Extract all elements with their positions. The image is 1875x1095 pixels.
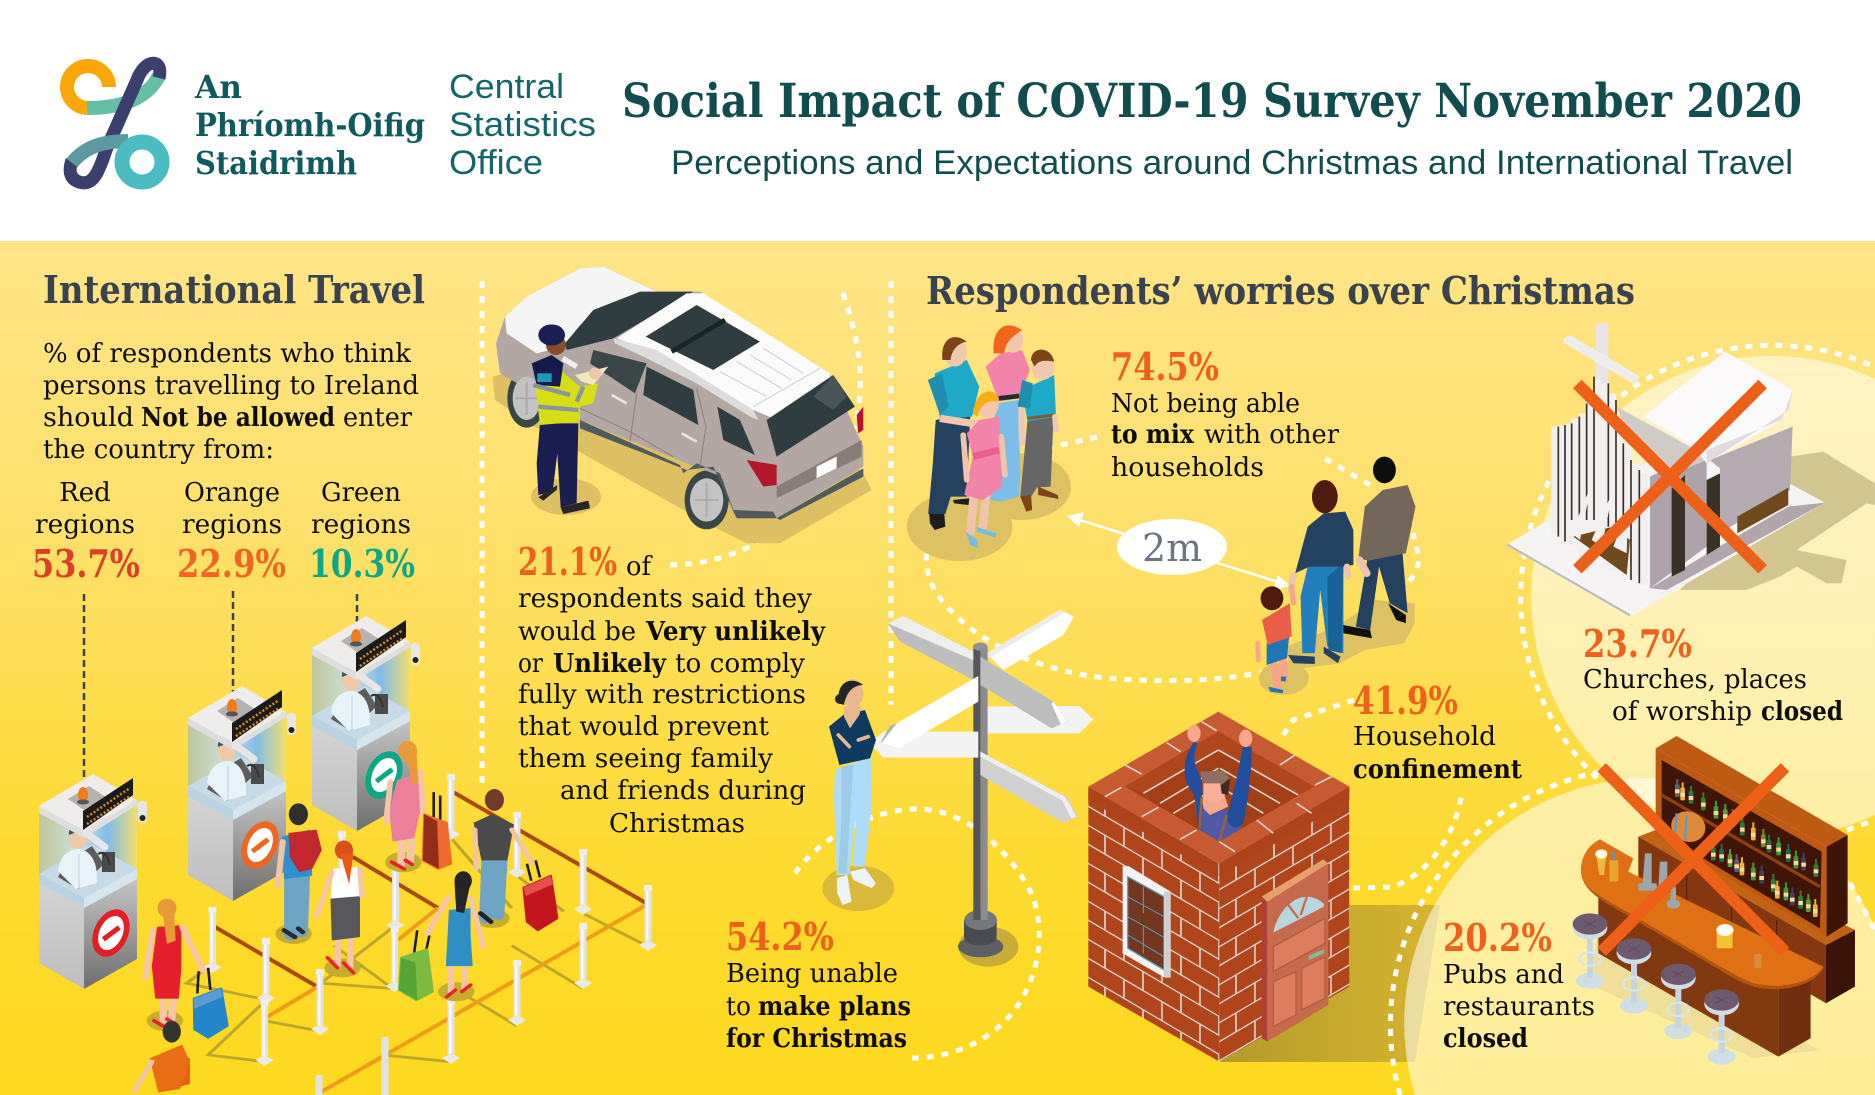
arrow: 2m distance: 2m xyxy=(1142,526,1202,570)
suitcase: green xyxy=(399,930,433,1000)
logo text: Irish name xyxy=(194,68,425,182)
text: 20.2% stat: closed xyxy=(1443,1024,1528,1054)
pale circle: churches xyxy=(1531,356,1875,838)
logo text: English name: Statistics xyxy=(449,106,596,144)
text: 74.5% stat: with other xyxy=(1204,420,1340,450)
text: 21.1% stat: of xyxy=(626,552,653,582)
text: 41.9% stat: Household xyxy=(1353,722,1496,752)
lower cabinet xyxy=(1638,830,1855,1003)
logo text: English name: Central xyxy=(449,68,564,106)
text: survey question: Not be allowed xyxy=(141,403,335,433)
region labels: Red xyxy=(59,478,111,508)
barrier ropes xyxy=(215,792,646,1092)
church fins xyxy=(1555,377,1643,585)
text: 23.7% stat: of worship xyxy=(1612,697,1752,727)
traveller: man with backpack xyxy=(275,803,322,944)
car windscreen xyxy=(565,292,693,350)
window xyxy=(1123,866,1171,978)
logo xyxy=(67,63,162,183)
bar counter top xyxy=(1581,839,1823,986)
church roof and walls xyxy=(1650,450,1707,588)
stat: orange regions: 22.9% xyxy=(177,541,286,586)
car wheels xyxy=(507,369,546,428)
beer taps xyxy=(1638,853,1680,909)
text: 54.2% stat: make plans xyxy=(758,992,911,1022)
text: survey question: the country from: xyxy=(43,435,274,465)
glasses and bottle xyxy=(1595,849,1762,968)
text: 23.7% stat: closed xyxy=(1761,697,1843,727)
text: 21.1% stat: to comply xyxy=(675,649,805,679)
traveller: man in orange shirt xyxy=(134,1021,190,1092)
woman in blue jeans xyxy=(1288,480,1353,664)
car bonnet xyxy=(505,267,657,353)
text: 54.2% stat: 54.2% xyxy=(726,914,834,959)
suitcase: blue xyxy=(194,968,228,1038)
region labels: Orange xyxy=(184,478,280,508)
text: 74.5% stat: 74.5% xyxy=(1111,344,1219,389)
illustration: second household xyxy=(1258,457,1416,695)
text: 21.1% stat: Unlikely xyxy=(553,649,667,679)
logo text: English name: Office xyxy=(449,144,543,182)
illustration: pub bar crossed out xyxy=(1573,736,1855,1065)
house left wall xyxy=(1088,787,1219,1062)
cross-out xyxy=(1577,384,1763,569)
text: survey question: enter xyxy=(343,403,413,433)
text: 21.1% stat: 21.1% xyxy=(518,539,617,584)
daughter xyxy=(963,391,1005,548)
car sunroof xyxy=(646,305,760,370)
car lights and plate xyxy=(747,460,777,487)
text: 54.2% stat: for Christmas xyxy=(726,1024,907,1054)
text: survey question: persons travelling to Ireland xyxy=(43,371,419,401)
wheel hubs xyxy=(513,377,541,420)
text: 74.5% stat: households xyxy=(1111,453,1264,483)
text: survey question: % of respondents who think xyxy=(43,339,411,369)
dotted dividers and connectors xyxy=(482,281,1875,1095)
text: 21.1% stat: Very unlikely xyxy=(645,617,826,647)
house shadow xyxy=(1220,905,1440,1062)
church shadow xyxy=(1680,452,1875,590)
car windows xyxy=(590,350,647,393)
region labels: regions xyxy=(182,510,282,540)
cross-out xyxy=(1602,767,1785,952)
logo text: Irish name: Phríomh-Oifig xyxy=(195,106,425,144)
dashed leader lines xyxy=(84,591,357,782)
suitcase: red xyxy=(523,860,557,930)
house front rim xyxy=(1088,787,1349,863)
signpost xyxy=(869,610,1093,967)
text: 41.9% stat: 41.9% xyxy=(1353,678,1458,723)
text: 23.7% stat: Churches, places xyxy=(1583,665,1807,695)
text: 20.2% stat xyxy=(1443,915,1595,1054)
arrow: 2m distance xyxy=(1067,512,1290,590)
traveller: woman in blue dress xyxy=(427,871,484,1001)
illustration: church crossed out xyxy=(1506,323,1875,617)
illustration: queue barrier shadows xyxy=(186,838,646,1062)
illustration: family group xyxy=(907,325,1071,561)
booth: red region xyxy=(39,774,147,989)
text: survey question: should xyxy=(43,403,134,433)
suitcase: orange xyxy=(423,792,451,869)
house rim xyxy=(1088,712,1349,863)
text: 21.1% stat xyxy=(518,539,826,839)
header background xyxy=(0,0,1875,241)
subtitle: Perceptions and Expectations around Christmas and International Travel xyxy=(671,144,1793,182)
region labels xyxy=(35,478,411,540)
garda shadow xyxy=(531,478,601,515)
text: 74.5% stat: Not being able xyxy=(1111,389,1300,419)
logo text: Irish name: Staidrimh xyxy=(195,144,357,182)
text: 21.1% stat: Christmas xyxy=(609,809,745,839)
text: 21.1% stat: or xyxy=(518,649,543,679)
region labels: regions xyxy=(311,510,411,540)
barrier posts xyxy=(204,774,657,1095)
logo text: English name xyxy=(449,68,596,182)
text: 54.2% stat: Being unable xyxy=(726,959,898,989)
stat: red regions: 53.7% xyxy=(32,541,140,586)
traveller: woman in red dress xyxy=(145,899,204,1031)
text: 54.2% stat xyxy=(726,914,911,1054)
cross xyxy=(1564,323,1640,407)
text: 21.1% stat: them seeing family xyxy=(518,744,773,774)
text: 20.2% stat: 20.2% xyxy=(1443,915,1552,960)
region labels: Green xyxy=(321,478,401,508)
yellow background xyxy=(0,241,1875,1095)
text: 21.1% stat: would be xyxy=(518,617,636,647)
text: 41.9% stat xyxy=(1353,678,1522,785)
church ground slab xyxy=(1506,433,1825,617)
booth: green region xyxy=(312,616,420,831)
booth: orange region xyxy=(188,686,296,901)
car roof xyxy=(617,293,832,418)
illustration: garda and car xyxy=(493,267,872,543)
text: 41.9% stat: confinement xyxy=(1353,755,1522,785)
bar counter front xyxy=(1598,897,1811,1057)
pale circle: pubs xyxy=(1404,778,1875,1095)
traveller: man in dark shirt xyxy=(474,789,533,928)
person with raised arms xyxy=(1185,725,1252,842)
house right wall xyxy=(1219,787,1349,1062)
traveller: woman in white top xyxy=(317,841,362,977)
heading: worries over christmas: Respondents’ worries over Christmas xyxy=(926,268,1635,313)
text: 54.2% stat: to xyxy=(726,992,751,1022)
heading: international travel: International Travel xyxy=(43,267,425,312)
garda xyxy=(532,324,608,514)
text: 23.7% stat xyxy=(1583,621,1843,727)
mother xyxy=(986,325,1030,502)
text: 20.2% stat: Pubs and xyxy=(1443,960,1564,990)
son xyxy=(1018,350,1059,512)
region labels: regions xyxy=(35,510,135,540)
bottles xyxy=(1675,779,1818,917)
bar stools xyxy=(1573,913,1739,1065)
text: 74.5% stat: to mix xyxy=(1111,420,1194,450)
father xyxy=(928,337,986,530)
text: 21.1% stat: respondents said they xyxy=(518,584,812,614)
car shadow xyxy=(493,327,872,543)
text: 21.1% stat: fully with restrictions xyxy=(518,680,806,710)
stat: green regions: 10.3% xyxy=(309,541,415,586)
door xyxy=(1262,859,1328,1042)
keg xyxy=(1667,807,1710,847)
woman at signpost xyxy=(822,679,894,911)
text: 21.1% stat: and friends during xyxy=(560,776,806,806)
queue travellers xyxy=(134,741,557,1092)
text: 21.1% stat: that would prevent xyxy=(518,712,770,742)
text: 74.5% stat xyxy=(1111,344,1340,483)
traveller: woman in pink dress xyxy=(385,741,423,872)
back cabinet xyxy=(1656,736,1848,937)
child xyxy=(1258,586,1293,693)
illustration: signpost and woman xyxy=(822,610,1093,967)
bar shadow xyxy=(1587,933,1820,1058)
man in brown jacket xyxy=(1343,457,1416,638)
illustration: brick house with person xyxy=(1088,712,1349,1062)
text: 23.7% stat: 23.7% xyxy=(1583,621,1692,666)
logo text: Irish name: An xyxy=(194,68,242,106)
car body xyxy=(496,267,863,518)
text: 20.2% stat: restaurants xyxy=(1443,992,1595,1022)
